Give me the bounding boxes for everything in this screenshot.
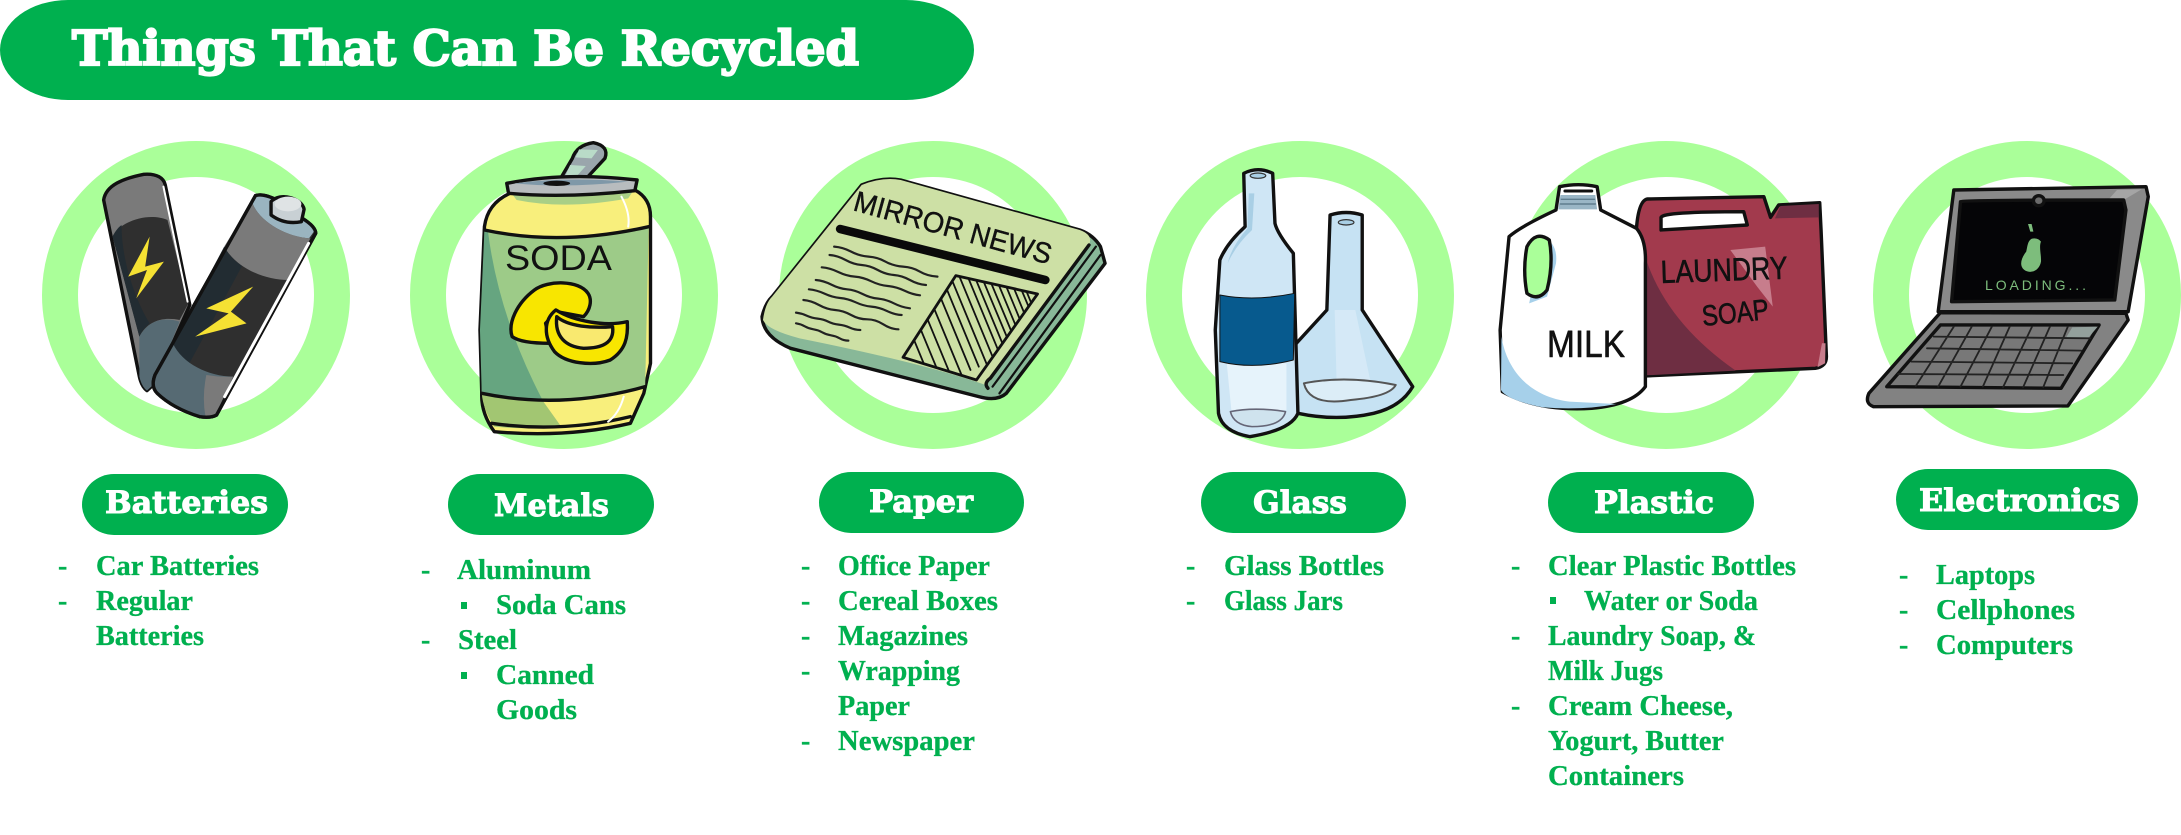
icon: glass bottle and flask xyxy=(1215,170,1413,437)
label: Metals xyxy=(448,474,654,535)
ring: paper xyxy=(797,159,1069,431)
icon: milk jug and laundry soap xyxy=(1500,185,1826,409)
list: metals: Canned xyxy=(496,660,594,691)
list: paper: Paper xyxy=(838,691,910,722)
ring: batteries xyxy=(60,159,332,431)
list: metals: Soda Cans xyxy=(496,590,626,621)
ring: electronics xyxy=(1891,159,2163,431)
label: Paper xyxy=(819,472,1024,533)
ring: glass xyxy=(1164,159,1436,431)
panel: plastic xyxy=(1500,159,1826,792)
list: metals: - xyxy=(421,555,430,586)
list: plastic: Laundry Soap, & xyxy=(1548,621,1756,652)
list: glass xyxy=(1186,551,1384,617)
list: paper xyxy=(801,551,998,757)
icon: laptop xyxy=(1867,187,2148,407)
panel: glass xyxy=(1164,159,1436,617)
text: LOADING: LOADING... xyxy=(1985,277,2086,293)
text: SOAP: SOAP xyxy=(1700,294,1770,333)
label: Plastic xyxy=(1548,472,1754,533)
list: paper: Newspaper xyxy=(838,726,975,757)
list: batteries: Regular xyxy=(96,586,193,617)
label: Plastic: Plastic xyxy=(1594,485,1714,521)
list: paper: - xyxy=(801,586,810,617)
list: electronics: Laptops xyxy=(1936,560,2035,591)
label: Batteries: Batteries xyxy=(105,485,268,521)
label: Glass: Glass xyxy=(1253,485,1347,521)
list: electronics: - xyxy=(1899,630,1908,661)
list: electronics: - xyxy=(1899,560,1908,591)
list: plastic: - xyxy=(1511,621,1520,652)
list: glass: - xyxy=(1186,586,1195,617)
list: plastic xyxy=(1511,551,1796,792)
list: paper: - xyxy=(801,621,810,652)
panel: paper xyxy=(762,159,1105,757)
title banner: Things That Can Be Recycled xyxy=(72,21,859,77)
list: metals xyxy=(421,555,626,726)
label: Electronics: Electronics xyxy=(1919,483,2120,519)
list: paper: Wrapping xyxy=(838,656,960,687)
list: batteries: - xyxy=(58,551,67,582)
panel: batteries xyxy=(58,159,332,652)
list: paper: Office Paper xyxy=(838,551,990,582)
text: SODA: SODA xyxy=(505,239,613,278)
label: Glass xyxy=(1201,472,1406,533)
ring: metals xyxy=(428,159,700,431)
label: Electronics xyxy=(1896,469,2138,530)
text: MIRROR NEWS: MIRROR NEWS xyxy=(850,186,1055,271)
list: electronics: Computers xyxy=(1936,630,2073,661)
list: paper: Cereal Boxes xyxy=(838,586,998,617)
list: plastic: Clear Plastic Bottles xyxy=(1548,551,1796,582)
panel: electronics xyxy=(1867,159,2163,661)
list: paper: Magazines xyxy=(838,621,968,652)
list: plastic: - xyxy=(1511,691,1520,722)
list: metals: - xyxy=(421,625,430,656)
list: batteries: Batteries xyxy=(96,621,204,652)
list: batteries: Car Batteries xyxy=(96,551,259,582)
list: electronics xyxy=(1899,560,2075,661)
list: metals: Aluminum xyxy=(457,555,591,586)
list: plastic: Water or Soda xyxy=(1584,586,1758,617)
ring: plastic xyxy=(1530,159,1802,431)
label: Metals: Metals xyxy=(494,488,609,524)
icon: soda can xyxy=(480,143,650,434)
list: batteries xyxy=(58,551,259,652)
label: Paper: Paper xyxy=(869,484,974,520)
text: LAUNDRY: LAUNDRY xyxy=(1660,250,1788,290)
list: paper: - xyxy=(801,656,810,687)
list: glass: - xyxy=(1186,551,1195,582)
list: plastic: Milk Jugs xyxy=(1548,656,1663,687)
list: plastic: Yogurt, Butter xyxy=(1548,726,1724,757)
list: glass: Glass Jars xyxy=(1224,586,1343,617)
list: plastic: Cream Cheese, xyxy=(1548,691,1733,722)
list: electronics: - xyxy=(1899,595,1908,626)
list: electronics: Cellphones xyxy=(1936,595,2075,626)
list: batteries: - xyxy=(58,586,67,617)
list: metals: Steel xyxy=(458,625,517,656)
icon: newspaper xyxy=(762,179,1105,399)
title banner xyxy=(0,0,974,100)
list: metals: Goods xyxy=(496,695,577,726)
list: paper: - xyxy=(801,551,810,582)
list: plastic: Containers xyxy=(1548,761,1684,792)
label: Batteries xyxy=(82,474,288,535)
icon: batteries xyxy=(104,174,316,417)
list: paper: - xyxy=(801,726,810,757)
list: plastic: - xyxy=(1511,551,1520,582)
text: MILK: MILK xyxy=(1547,324,1625,366)
list: glass: Glass Bottles xyxy=(1224,551,1384,582)
panel: metals xyxy=(421,143,700,726)
